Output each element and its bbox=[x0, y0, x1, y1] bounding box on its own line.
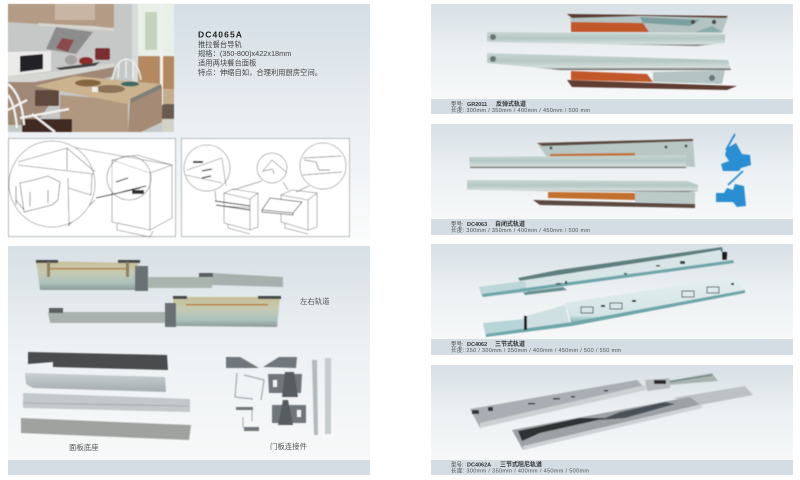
product text: DC4065A specification: DC4065A bbox=[198, 30, 243, 40]
caption band: GR2011: 型号: bbox=[451, 100, 464, 108]
image: left and right rails bbox=[36, 260, 283, 327]
product text: DC4065A specification: 适用两块餐台面板 bbox=[198, 58, 257, 68]
product text: DC4065A specification bbox=[198, 30, 322, 77]
caption band: DC4063: 型号: bbox=[451, 220, 464, 228]
caption band: DC4062A: 长度: 300mm / 350mm / 400mm / 450mm / 500mm bbox=[451, 466, 589, 474]
panel: rail components bbox=[8, 246, 370, 475]
image: GR2011 rails bbox=[487, 14, 737, 90]
caption band: DC4062: 三节式轨道 bbox=[495, 340, 525, 348]
caption band: DC4063: 长度: 300mm / 350mm / 400mm / 450mm / 500 mm bbox=[451, 226, 590, 234]
diagram: pull-out operation steps bbox=[182, 138, 350, 236]
caption band: DC4062: 长度: 250 / 300mm / 350mm / 400mm / 450mm / 500 / 550 mm bbox=[451, 346, 621, 354]
caption band: DC4063 bbox=[431, 219, 793, 235]
icon: blue clips bbox=[716, 134, 751, 207]
caption band: GR2011: 长度: 300mm / 350mm / 400mm / 450mm / 500 mm bbox=[451, 106, 590, 114]
diagram: cabinet installation detail bbox=[8, 138, 176, 237]
image: DC4062A rails bbox=[470, 373, 753, 450]
panel: GR2011 rail bbox=[431, 4, 793, 114]
footer band bbox=[8, 460, 370, 475]
caption band: DC4062A: 三节式阻尼轨道 bbox=[500, 460, 542, 468]
label: door connector: 门板连接件 bbox=[270, 442, 308, 451]
image: DC4063 rails bbox=[467, 139, 698, 208]
panel: DC4065A product bbox=[8, 4, 370, 240]
caption band: DC4063: DC4063 bbox=[467, 222, 487, 228]
image: door connectors bbox=[226, 357, 331, 435]
panel: DC4063 rail bbox=[431, 124, 793, 235]
caption band: DC4062A: 型号: bbox=[451, 460, 464, 468]
image: DC4062 rails bbox=[479, 247, 745, 337]
panel: DC4062 rail bbox=[431, 244, 793, 355]
product text: DC4065A specification: 推拉餐台导轨 bbox=[198, 40, 242, 49]
label: panel base: 面板底座 bbox=[69, 443, 99, 452]
product text: DC4065A specification: 特点：伸缩自如，合理利用厨房空间。 bbox=[198, 68, 322, 77]
caption band: GR2011 bbox=[431, 99, 793, 114]
caption band: DC4062: DC4062 bbox=[467, 342, 487, 348]
caption band: DC4062: 型号: bbox=[451, 340, 464, 348]
product text: DC4065A specification: 规格：(350-800)x422x18mm bbox=[198, 49, 291, 58]
caption band: DC4062 bbox=[431, 339, 793, 355]
caption band: DC4063: 自闭式轨道 bbox=[495, 220, 525, 228]
label: left and right rails: 左右轨道 bbox=[300, 297, 330, 306]
photo: kitchen with pull-out table bbox=[8, 4, 174, 132]
caption band: GR2011: 反弹式轨道 bbox=[496, 100, 526, 108]
image: panel bases bbox=[21, 352, 191, 440]
caption band: DC4062A bbox=[431, 460, 793, 475]
caption band: GR2011: GR2011 bbox=[467, 102, 487, 108]
caption band: DC4062A: DC4062A bbox=[467, 462, 491, 468]
panel: DC4062A rail bbox=[431, 365, 793, 475]
